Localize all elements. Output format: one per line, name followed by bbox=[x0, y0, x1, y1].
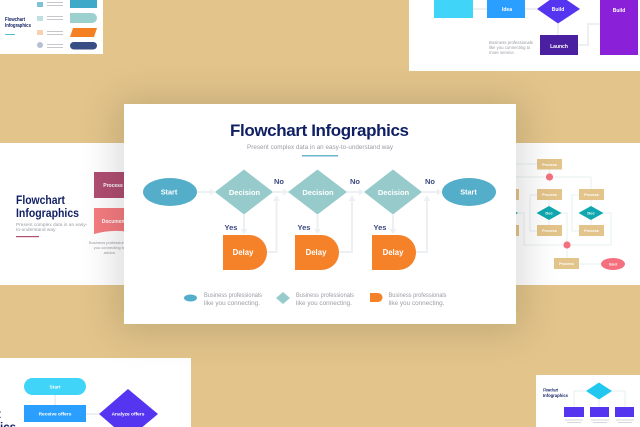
process box: Process bbox=[103, 183, 123, 189]
slide background bbox=[409, 0, 640, 71]
receive offers box: Receive offers bbox=[39, 412, 72, 418]
description text: advice. bbox=[104, 250, 116, 255]
legend: delay: like you connecting. bbox=[388, 300, 445, 307]
yes labels: Yes bbox=[225, 223, 237, 232]
idea box bbox=[487, 0, 525, 18]
legend: decision: Business professionals bbox=[296, 292, 354, 299]
process labels: Process bbox=[559, 262, 574, 266]
pink junctions bbox=[546, 173, 571, 249]
connectors bbox=[574, 391, 625, 407]
decision 2: Decision bbox=[302, 188, 334, 197]
panel: left slide bbox=[0, 143, 131, 285]
build tall box: Build bbox=[613, 8, 625, 14]
process labels: Process bbox=[584, 229, 599, 233]
decision 1: Decision bbox=[229, 188, 261, 197]
yes labels: Yes bbox=[374, 223, 386, 232]
legend: delay: Business professionals bbox=[388, 292, 446, 299]
connector arrows bbox=[197, 188, 442, 252]
slide background bbox=[536, 375, 640, 427]
decision 1 bbox=[215, 170, 273, 214]
delay 1: Delay bbox=[233, 248, 254, 257]
row text lines bbox=[47, 2, 63, 48]
slide background bbox=[0, 358, 191, 427]
start pill: Start bbox=[50, 384, 61, 390]
yes labels: Yes bbox=[298, 223, 310, 232]
slide background bbox=[0, 143, 124, 285]
decision 3 bbox=[364, 170, 422, 214]
analyze offers diamond: Analyze offers bbox=[112, 412, 145, 418]
decision diamonds: Dec bbox=[545, 210, 553, 216]
accent underline bbox=[302, 155, 338, 156]
description text: like you connecting to bbox=[489, 45, 531, 50]
end start node bbox=[442, 178, 496, 206]
description text: Business professionals bbox=[489, 40, 533, 45]
no labels: No bbox=[350, 177, 360, 186]
subtitle: Present complex data in an easy-to-understand way bbox=[247, 144, 394, 151]
slide title: Flowchart bbox=[16, 195, 65, 207]
decision 2 bbox=[288, 170, 347, 214]
row icons bbox=[37, 2, 43, 48]
process bars bbox=[70, 0, 97, 50]
slide background bbox=[0, 0, 103, 54]
accent line bbox=[5, 34, 15, 35]
build diamond: Build bbox=[552, 7, 564, 13]
legend: start: Business professionals bbox=[204, 292, 262, 299]
description text: Business professionals bbox=[89, 240, 130, 245]
process labels: Process bbox=[542, 193, 557, 197]
build tall box bbox=[600, 0, 638, 55]
build diamond bbox=[537, 0, 580, 24]
start node: Start bbox=[161, 188, 178, 196]
slide title: Flowchart bbox=[5, 17, 25, 23]
yes labels bbox=[225, 223, 386, 232]
purple boxes bbox=[564, 407, 634, 417]
process box bbox=[94, 172, 124, 198]
end node: End bbox=[609, 262, 617, 266]
analyze offers diamond bbox=[99, 389, 158, 427]
start node bbox=[143, 178, 197, 206]
delay 3: Delay bbox=[383, 248, 404, 257]
process labels: Process bbox=[584, 193, 599, 197]
decision diamonds: Dec bbox=[587, 210, 595, 216]
cyan box bbox=[434, 0, 473, 18]
process labels bbox=[542, 163, 599, 266]
panel: bottom left slide bbox=[0, 358, 191, 427]
legend: start bbox=[184, 292, 264, 307]
launch box: Launch bbox=[550, 44, 568, 50]
process labels: Process bbox=[542, 229, 557, 233]
top diamond bbox=[586, 382, 612, 400]
main card shadow bbox=[116, 100, 524, 332]
delay 3 bbox=[372, 235, 416, 270]
legend: delay bbox=[370, 292, 448, 307]
slide background bbox=[516, 143, 640, 285]
accent line bbox=[16, 236, 39, 237]
no labels bbox=[274, 177, 435, 186]
idea box: Idea bbox=[502, 7, 512, 13]
no labels: No bbox=[425, 177, 435, 186]
document box: Document bbox=[102, 219, 127, 225]
panel: main flowchart card bbox=[124, 104, 516, 324]
process labels: Process bbox=[542, 163, 557, 167]
panel: right slide bbox=[505, 143, 640, 285]
launch box bbox=[540, 35, 578, 55]
connectors bbox=[473, 9, 600, 45]
legend: decision: like you connecting. bbox=[296, 300, 352, 307]
slide subtitle: to-understand way bbox=[16, 227, 56, 233]
description text: you connecting to bbox=[94, 245, 126, 250]
delay 2: Delay bbox=[306, 248, 327, 257]
legend: decision bbox=[276, 292, 356, 307]
slide title: Infographics bbox=[5, 23, 31, 29]
description text: more service. bbox=[489, 50, 515, 55]
panel: top left slide bbox=[0, 0, 103, 54]
slide title: Infographics bbox=[543, 393, 568, 398]
panel: top right slide bbox=[409, 0, 640, 71]
title: Flowchart Infographics bbox=[230, 121, 409, 140]
delay 1 bbox=[223, 235, 267, 270]
slide subtitle: Present complex data in an easy- bbox=[16, 222, 88, 228]
legend: start: like you connecting. bbox=[204, 300, 260, 307]
card background bbox=[124, 104, 516, 324]
caption lines bbox=[565, 420, 634, 423]
decision 3: Decision bbox=[378, 188, 410, 197]
no labels: No bbox=[274, 177, 284, 186]
panel: bottom right slide bbox=[536, 375, 640, 427]
process boxes bbox=[510, 159, 604, 269]
connectors bbox=[55, 395, 99, 414]
end start node: Start bbox=[460, 188, 477, 196]
delay 2 bbox=[295, 235, 339, 270]
receive offers box bbox=[24, 405, 86, 422]
slide title: Flowchart bbox=[543, 388, 558, 392]
document box bbox=[94, 208, 124, 234]
end node bbox=[601, 258, 625, 270]
decision diamonds bbox=[516, 206, 604, 220]
start pill bbox=[24, 378, 86, 395]
connectors bbox=[516, 164, 611, 264]
slide title: Infographics bbox=[16, 208, 79, 220]
